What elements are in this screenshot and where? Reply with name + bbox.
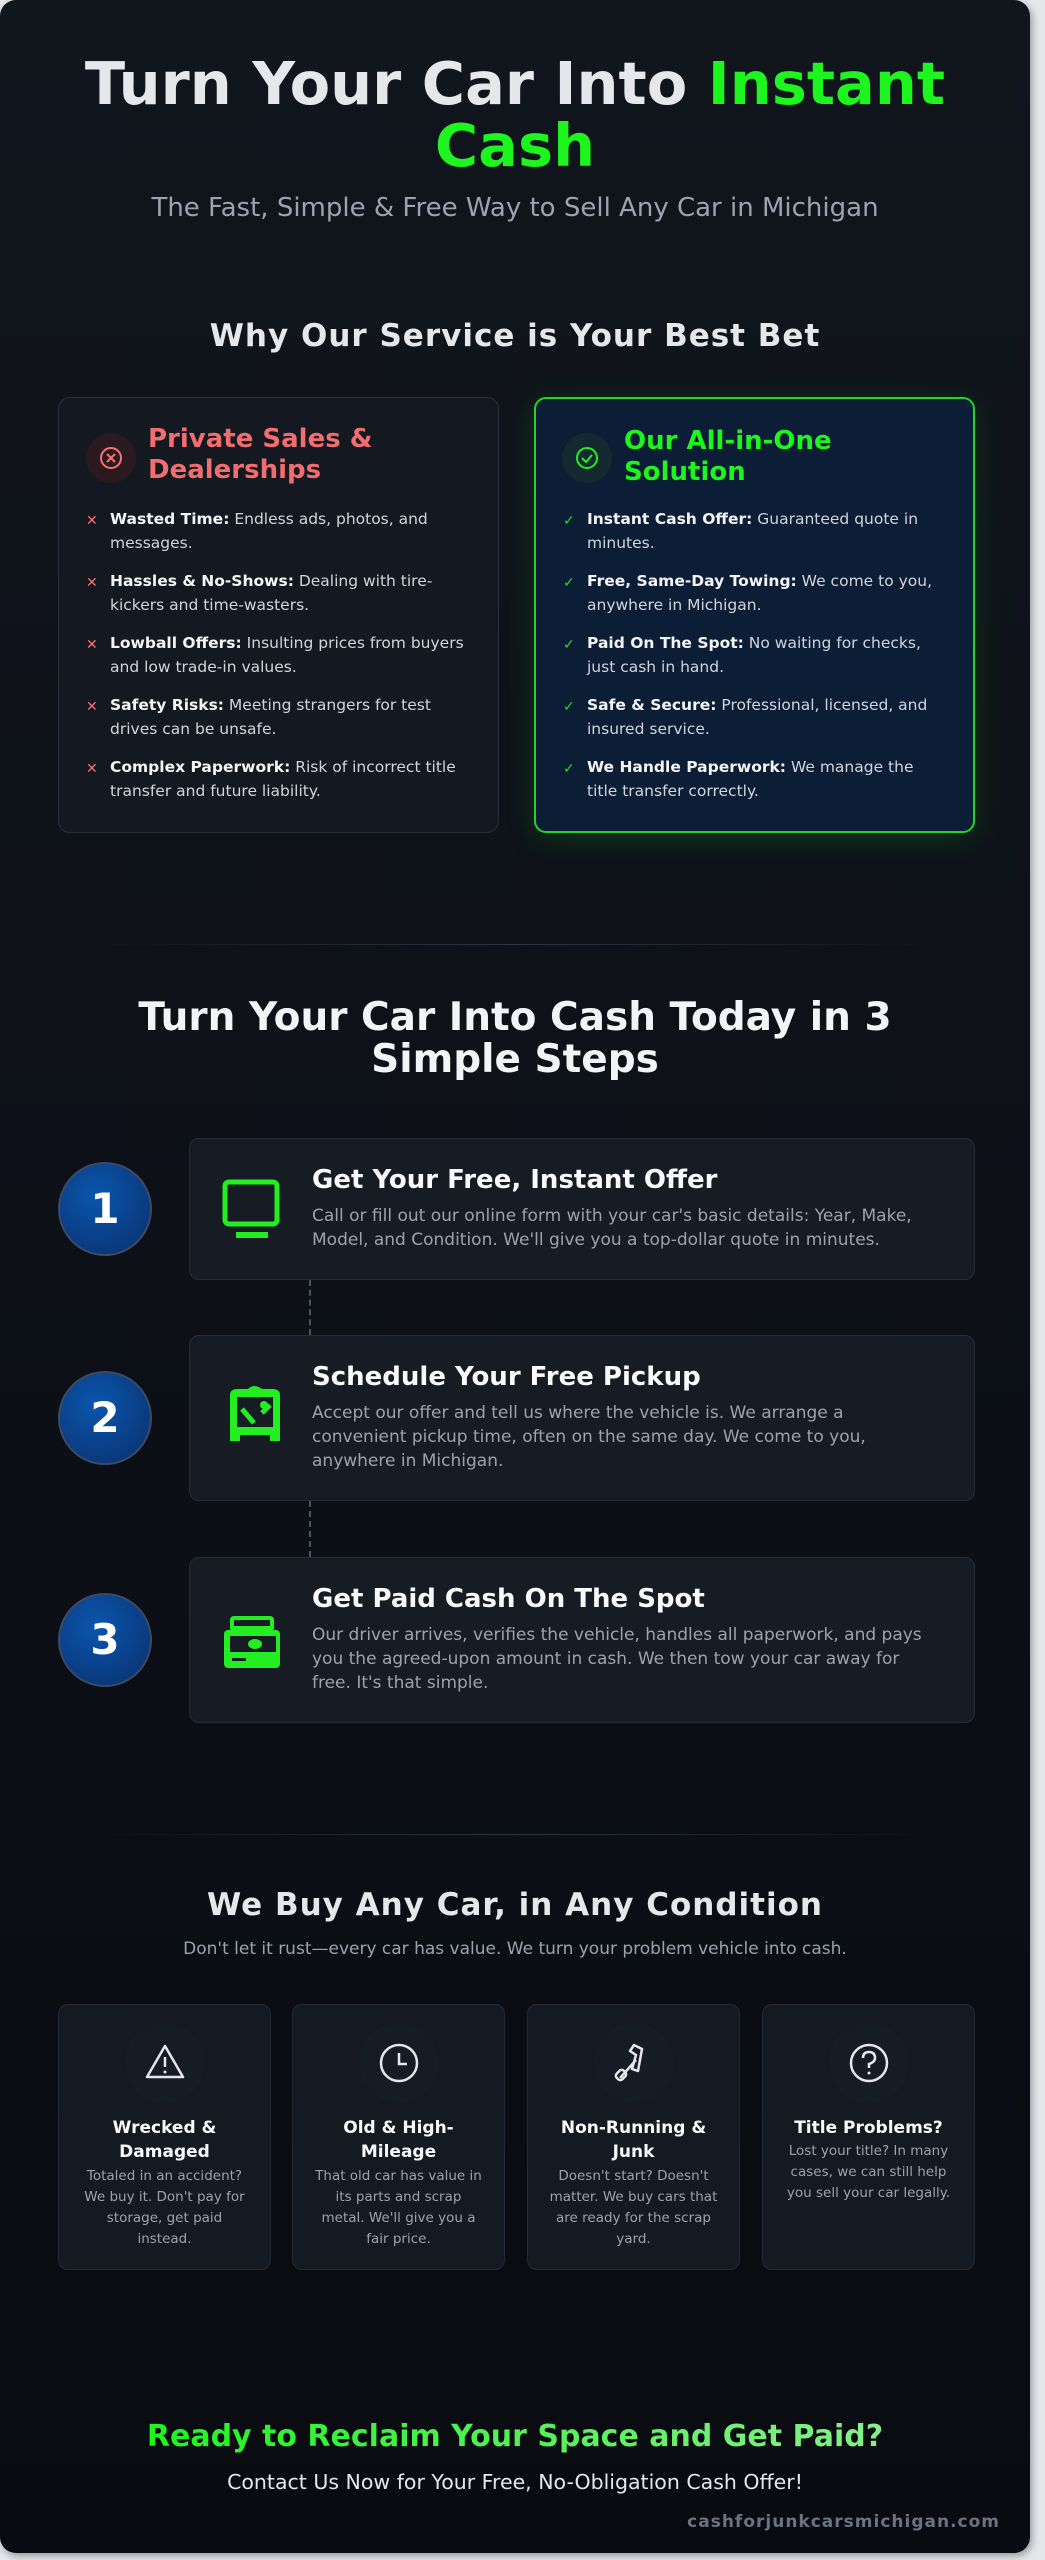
card: title: Title Problems? [794,2118,943,2138]
panel: our solution: ✓ [563,575,575,591]
list: Instant Cash Offer: Guaranteed quote in minutes. [587,510,918,552]
icon: check circle [562,433,612,483]
CTA subtext: Contact Us Now for Your Free, No-Obligation Cash Offer! [227,2470,803,2494]
section heading: steps: Turn Your Car Into Cash Today in 3 [138,995,892,1040]
card: wrecked: Totaled in an accident? We buy it. Don't pay for storage, get paid instead. [84,2168,245,2247]
icon: tow truck [230,1386,280,1441]
card: non-running: Non-Running & [561,2118,706,2138]
panel: our solution: Free, Same-Day Towing: We come to you, anywhere in Michigan. [587,572,932,614]
section heading: why: Why Our Service is Your Best Bet [210,318,820,354]
card: non-running: Doesn't start? Doesn't matter. We buy cars that are ready for the scrap yard. [550,2168,717,2247]
step 2 number [58,1371,152,1465]
panel: private sales: ✕ [86,513,98,529]
card: wrecked [58,2004,271,2270]
panel: private sales: Lowball Offers: Insulting prices from buyers and low trade-in values. [110,634,464,676]
list: Wasted Time: Endless ads, photos, and messages. [110,510,428,552]
step 1 card: Get Your Free, Instant Offer [312,1165,718,1195]
subtitle: The Fast, Simple & Free Way to Sell Any Car in Michigan [151,193,879,223]
step 2 card [189,1335,975,1501]
CTA heading: Ready to Reclaim Your Space and Get Paid? [147,2419,883,2454]
panel: our solution: ✓ [563,637,575,653]
panel: our solution: ✓ [563,513,575,529]
panel: private sales: ✕ [86,761,98,777]
step 3 card [189,1557,975,1723]
step 2 number: 2 [90,1393,120,1442]
panel: our solution: ✓ [563,761,575,777]
panel: private sales [58,397,499,833]
step 3 card: Our driver arrives, verifies the vehicle, handles all paperwork, and pays you the agreed-upon amount in cash. We then tow your car away for free. It's that simple. [312,1625,922,1693]
icon: monitor [222,1180,280,1238]
panel: private sales: ✕ [86,575,98,591]
panel: our solution: Paid On The Spot: No waiting for checks, just cash in hand. [587,634,921,676]
icon: x circle [86,433,136,483]
panel: private sales: ✕ [86,699,98,715]
step 3 number: 3 [90,1615,120,1664]
card: old [292,2004,505,2270]
panel: our solution [534,397,975,833]
heading: Private Sales & [148,424,372,454]
heading [624,426,832,487]
panel: our solution: We Handle Paperwork: We manage the title transfer correctly. [587,758,913,800]
section heading: steps: Simple Steps [371,1037,659,1082]
heading: Solution [624,457,746,487]
panel: private sales: Complex Paperwork: Risk of incorrect title transfer and future liability. [110,758,456,800]
card: non-running [527,2004,740,2270]
step 1 card [189,1138,975,1280]
domain: cashforjunkcarsmichigan.com [687,2512,1000,2532]
step 1 card: Call or fill out our online form with your car's basic details: Year, Make, Model, and Condition. We'll give you a top-dollar quote in minutes. [312,1206,912,1250]
section heading: any condition: We Buy Any Car, in Any Condition [207,1887,823,1923]
panel: our solution: ✓ [563,699,575,715]
connector lines [309,1280,311,1335]
card: non-running: Junk [613,2142,654,2162]
card: wrecked: Wrecked & [113,2118,216,2138]
step 2 card: Accept our offer and tell us where the vehicle is. We arrange a convenient pickup time, often on the same day. We come to you, anywhere in Michigan. [312,1403,866,1471]
panel: private sales: Safety Risks: Meeting strangers for test drives can be unsafe. [110,696,431,738]
panel: our solution: Safe & Secure: Professional, licensed, and insured service. [587,696,927,738]
section heading: steps [138,995,892,1082]
heading: Dealerships [148,455,321,485]
icon: cash register [224,1616,280,1668]
card: old: Old & High- [343,2118,454,2138]
title: Cash [435,111,595,180]
icon: tools [594,2023,674,2103]
icon: clock [359,2023,439,2103]
title [85,49,945,180]
card: old: That old car has value in its parts and scrap metal. We'll give you a fair price. [315,2168,482,2247]
title: Turn Your Car Into Instant [85,49,945,118]
step 1 number [58,1162,152,1256]
section subtitle: Don't let it rust—every car has value. We turn your problem vehicle into cash. [183,1939,847,1959]
heading [148,424,372,485]
step 1 number: 1 [90,1184,120,1233]
step 3 number [58,1593,152,1687]
step 3 card: Get Paid Cash On The Spot [312,1584,705,1614]
heading: Our All-in-One [624,426,832,456]
icon: warning [125,2023,205,2103]
card: wrecked: Damaged [119,2142,210,2162]
card: title: Lost your title? In many cases, we can still help you sell your car legally. [787,2143,950,2201]
panel: private sales: Hassles & No-Shows: Dealing with tire-kickers and time-wasters. [110,572,432,614]
card: old: Mileage [361,2142,436,2162]
step 2 card: Schedule Your Free Pickup [312,1362,701,1392]
panel: private sales: ✕ [86,637,98,653]
card: title [762,2004,975,2270]
icon: question [829,2023,909,2103]
